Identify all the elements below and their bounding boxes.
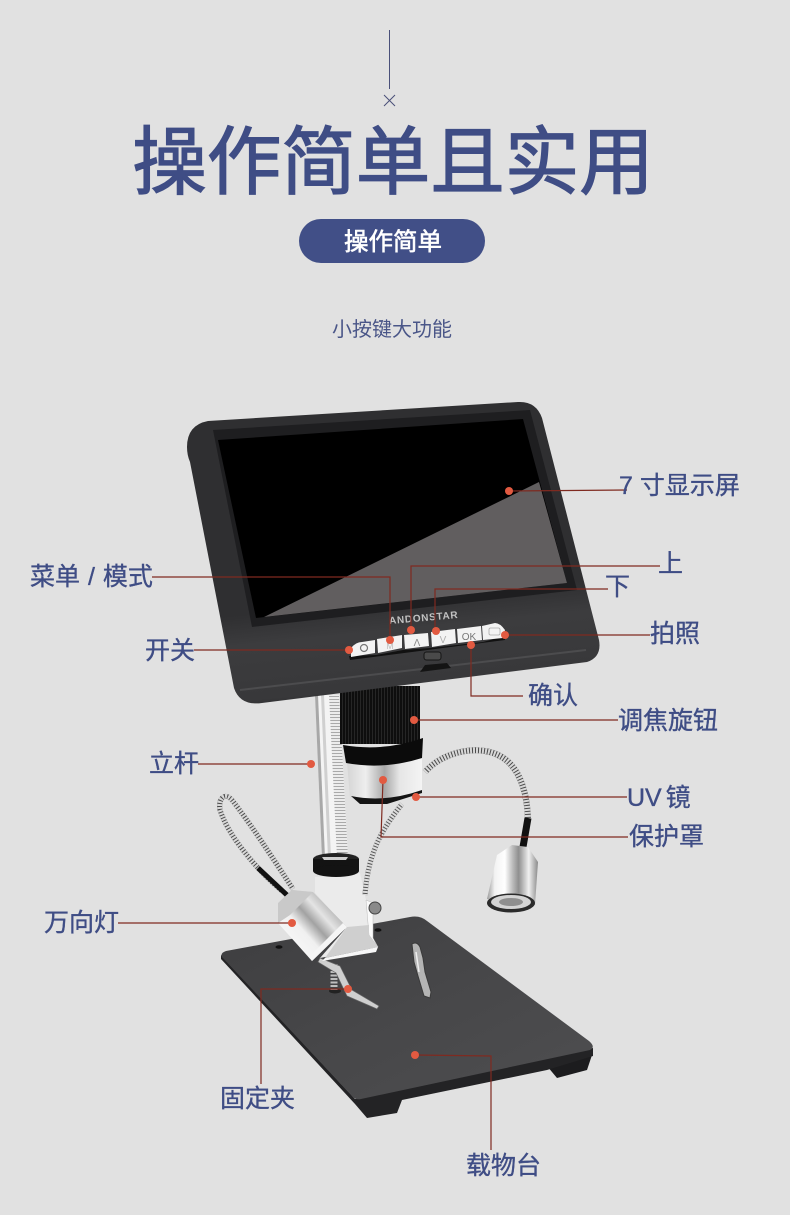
camera lens xyxy=(340,686,423,804)
callout: 上 xyxy=(407,550,683,634)
monitor body xyxy=(187,402,600,703)
callout: 拍照 xyxy=(501,620,700,648)
callout: UV 镜 xyxy=(412,784,691,812)
badge: 操作简单: 操作简单 xyxy=(344,228,442,256)
callout: 菜单 / 模式: 菜单 / 模式 xyxy=(30,563,153,591)
callout: 固定夹: 固定夹 xyxy=(220,1085,295,1113)
screen glare xyxy=(264,482,567,617)
left lamp xyxy=(278,890,347,961)
callout: 立杆: 立杆 xyxy=(149,750,199,778)
right lamp xyxy=(487,845,538,912)
callout: 保护罩 xyxy=(379,776,704,851)
callout: 开关 xyxy=(145,637,353,665)
pole xyxy=(315,695,348,858)
monitor xyxy=(187,402,600,703)
screen xyxy=(218,419,567,618)
callout: 确认: 确认 xyxy=(528,682,578,710)
callout: 开关: 开关 xyxy=(145,637,195,665)
callout: UV 镜: UV 镜 xyxy=(627,784,691,812)
control buttons: OK xyxy=(462,632,477,643)
callout: 确认 xyxy=(467,641,578,710)
left gooseneck xyxy=(220,796,293,896)
control buttons: M xyxy=(386,641,394,651)
badge: 操作简单 xyxy=(299,219,485,263)
control buttons xyxy=(349,623,505,660)
control buttons: V xyxy=(440,635,447,646)
callout: 菜单 / 模式 xyxy=(30,563,394,644)
callout: 拍照: 拍照 xyxy=(650,620,700,648)
callout: 下: 下 xyxy=(605,573,630,601)
title: 操作简单且实用 xyxy=(132,121,654,204)
callout: 万向灯: 万向灯 xyxy=(44,909,119,937)
pole collar xyxy=(313,853,359,877)
callout: 上: 上 xyxy=(658,550,683,578)
callout: 调焦旋钮 xyxy=(410,707,718,735)
base plate xyxy=(221,916,593,1118)
brand name: ANDONSTAR xyxy=(389,610,459,627)
callout: 载物台 xyxy=(411,1051,541,1180)
subtitle: 小按键大功能 xyxy=(332,318,452,341)
callout: 调焦旋钮: 调焦旋钮 xyxy=(618,707,718,735)
callout: 下 xyxy=(432,573,630,635)
callout: 固定夹 xyxy=(220,985,352,1113)
decorative top mark xyxy=(384,30,395,106)
callout: 万向灯 xyxy=(44,909,296,937)
callout: 载物台: 载物台 xyxy=(466,1152,541,1180)
slider switch xyxy=(420,652,451,672)
stand bracket xyxy=(315,873,381,961)
product: digital microscope xyxy=(187,402,600,1118)
specimen clips xyxy=(318,943,431,1009)
right gooseneck xyxy=(425,750,528,847)
callout: 7 寸显示屏 xyxy=(505,472,740,500)
callout: 保护罩: 保护罩 xyxy=(629,823,704,851)
middle gooseneck xyxy=(365,804,402,895)
callout: 7 寸显示屏: 7 寸显示屏 xyxy=(619,472,740,500)
control buttons: Λ xyxy=(414,638,421,649)
callout: 立杆 xyxy=(149,750,315,778)
